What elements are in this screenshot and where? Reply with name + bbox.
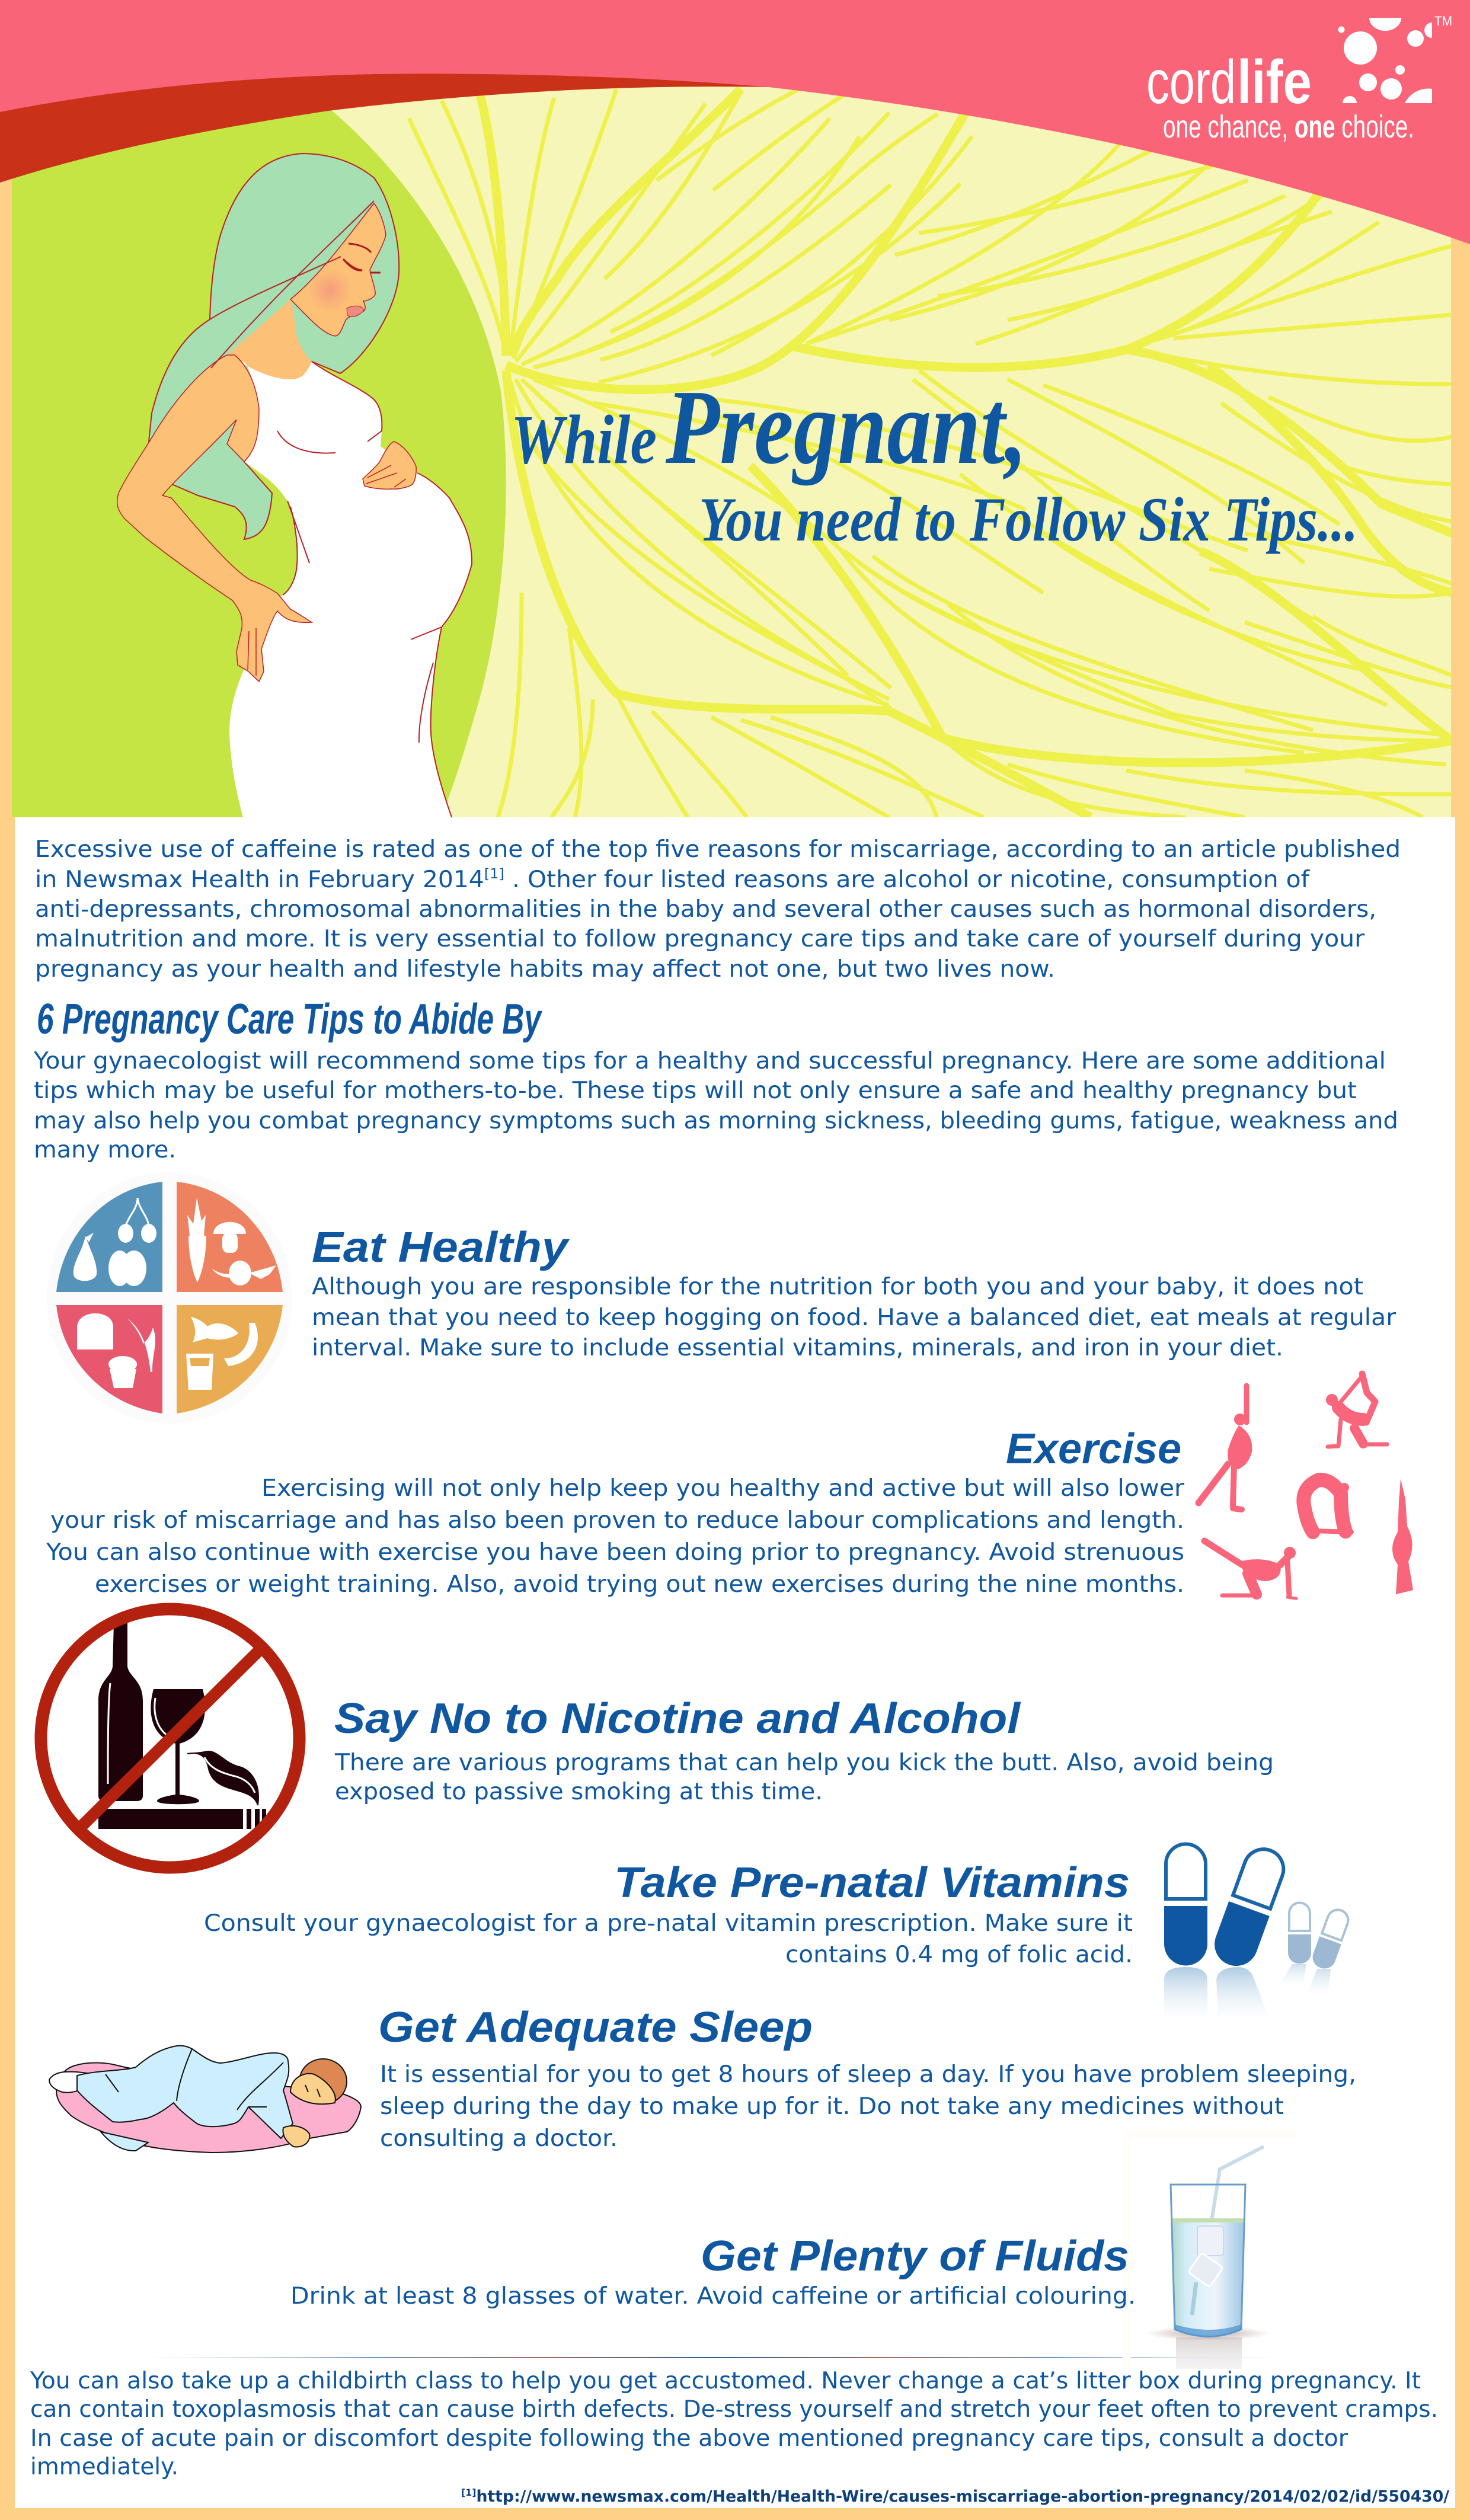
capsule one (1164, 1844, 1207, 1965)
plate halo (47, 1172, 292, 1424)
body text (380, 2061, 1356, 2152)
lower leg (101, 2132, 148, 2151)
pink band (0, 0, 1470, 244)
neck (227, 299, 312, 379)
shadow (1146, 2326, 1270, 2340)
arm (117, 355, 312, 682)
lips (347, 306, 364, 316)
section intro paragraph: may also help you combat pregnancy symptoms such as morning sickness, bleeding gums, fatigue, weakness and (34, 1108, 1398, 1134)
intro paragraph: Excessive use of caffeine is rated as one of the top five reasons for miscarriage, according to an article published (35, 836, 1401, 863)
body text (334, 1750, 1274, 1805)
bottle highlight (108, 1683, 110, 1784)
closing paragraph: In case of acute pain or discomfort despite following the above mentioned pregnancy care tips, consult a doctor (30, 2425, 1348, 2452)
smoke (187, 1751, 258, 1805)
heading: Exercise (1006, 1425, 1181, 1473)
body text: consulting a doctor. (380, 2125, 618, 2152)
body text: contains 0.4 mg of folic acid. (785, 1942, 1133, 1968)
section heading: 6 Pregnancy Care Tips to Abide By (37, 996, 543, 1043)
intro paragraph: in Newsmax Health in February 2014 (35, 866, 464, 893)
closing paragraph: You can also take up a childbirth class to help you get accustomed. Never change a cat’s litter box during pregnancy. It (30, 2368, 1421, 2394)
section intro paragraph (33, 1048, 1398, 1163)
icon: sleeping woman (49, 2046, 361, 2153)
ice cube top (1197, 2226, 1223, 2256)
yellow leaf vein pattern, thin lines (409, 89, 1452, 817)
panel: pale yellow background (332, 87, 1451, 817)
body text: Consult your gynaecologist for a pre-natal vitamin prescription. Make sure it (204, 1910, 1133, 1937)
icon: no alcohol or smoking sign (41, 1609, 299, 1867)
section intro paragraph: many more. (34, 1137, 176, 1163)
icon: vitamin capsules (1164, 1843, 1352, 2016)
closing paragraph (30, 2368, 1438, 2480)
glass base (1175, 2324, 1241, 2337)
body text: There are various programs that can help you kick the butt. Also, avoid being (334, 1750, 1274, 1776)
bottle (98, 1623, 143, 1801)
pillow (56, 2062, 361, 2153)
intro paragraph: malnutrition and more. It is very essential to follow pregnancy care tips and take care of yourself during your (35, 926, 1365, 952)
pose: kneeling backbend (1326, 1374, 1387, 1447)
green circle backdrop (12, 101, 506, 817)
tip: Take Pre-natal Vitamins (204, 1859, 1133, 1968)
body text: your risk of miscarriage and has also been proven to reduce labour complications and length. (50, 1507, 1184, 1534)
hand (283, 2126, 309, 2147)
intro paragraph: [1] (484, 866, 504, 882)
heading: Say No to Nicotine and Alcohol (334, 1695, 1021, 1742)
pajama folds (106, 2049, 283, 2110)
tip: Eat Healthy (312, 1224, 1396, 1361)
hand on belly (363, 442, 416, 489)
logo mark dots (1338, 18, 1432, 103)
trademark: TM (1434, 14, 1452, 28)
reflection (1176, 2337, 1242, 2369)
intro paragraph (35, 836, 1401, 983)
reflections (1164, 1967, 1207, 2016)
heading: Eat Healthy (312, 1224, 570, 1271)
hair (149, 153, 399, 539)
top curved band (0, 0, 1470, 244)
tip: Say No to Nicotine and Alcohol (334, 1695, 1274, 1805)
sock (49, 2072, 107, 2093)
capsule two (1209, 1843, 1291, 1972)
content panel (15, 817, 1455, 2508)
intro paragraph: anti-depressants, chromosomal abnormalities in the baby and several other causes such as hormonal disorders, (35, 896, 1376, 923)
outline strokes (210, 201, 472, 817)
water (1171, 2218, 1245, 2336)
body text: mean that you need to keep hogging on food. Have a balanced diet, eat meals at regular (312, 1304, 1396, 1331)
body text (46, 1475, 1185, 1598)
title (511, 368, 1358, 554)
food silhouettes (74, 1198, 276, 1390)
closing paragraph: can contain toxoplasmosis that can cause birth defects. De-stress yourself and stretch your feet often to prevent cramps. (30, 2396, 1438, 2423)
tip: Exercise (46, 1425, 1185, 1598)
finger lines (248, 628, 256, 676)
body text (204, 1910, 1133, 1968)
body text: Although you are responsible for the nutrition for both you and your baby, it does not (312, 1274, 1363, 1300)
glass outline (1171, 2185, 1245, 2336)
footnote source link: http://www.newsmax.com/Health/Health-Wire/causes-miscarriage-abortion-pregnancy/2014/02/02/id/550430/ (476, 2487, 1449, 2506)
body text (312, 1274, 1396, 1361)
icon: yoga silhouettes (1199, 1374, 1413, 1598)
pink quadrant: grains (56, 1305, 162, 1413)
hero banner (12, 59, 1452, 817)
dark red swoosh (0, 0, 771, 183)
icon: food plate (47, 1172, 292, 1424)
ice cube lower (1188, 2253, 1223, 2287)
hair (299, 2059, 347, 2104)
face (290, 2074, 335, 2104)
body text: exposed to passive smoking at this time. (335, 1779, 823, 1805)
illustration: pregnant woman (117, 153, 472, 817)
pose: headstand (1392, 1479, 1413, 1594)
belly hand finger lines (366, 465, 406, 487)
closed eyes (305, 2085, 320, 2097)
orange quadrant: vegetables (177, 1182, 283, 1292)
cigarette (98, 1809, 266, 1829)
blue quadrant: fruit (56, 1182, 162, 1292)
yellow leaf vein pattern, thick branches (480, 89, 1452, 817)
title line: You need to follow: You need to Follow Six Tips... (699, 485, 1358, 554)
title: Pregnant, (665, 368, 1027, 486)
prohibition ring and slash (82, 1649, 260, 1826)
body text: exercises or weight training. Also, avoid trying out new exercises during the nine months. (95, 1571, 1184, 1598)
small capsule three (1288, 1902, 1311, 1963)
water edge tint (1171, 2218, 1245, 2222)
section intro paragraph: Your gynaecologist will recommend some tips for a healthy and successful pregnancy. Here are some additional (33, 1048, 1386, 1074)
heading: Take Pre-natal Vitamins (614, 1859, 1130, 1907)
section intro paragraph: tips which may be useful for mothers-to-be. These tips will not only ensure a safe and healthy pregnancy but (34, 1077, 1357, 1104)
straw (1211, 2147, 1264, 2224)
dress (227, 355, 472, 817)
pose: cat leg lift (1204, 1541, 1296, 1598)
small capsule four (1309, 1907, 1352, 1972)
eye and brow (343, 244, 381, 273)
body text: Exercising will not only help keep you healthy and active but will also lower (261, 1475, 1185, 1502)
wine glass (151, 1689, 205, 1804)
body text: sleep during the day to make up for it. Do not take any medicines without (380, 2093, 1284, 2120)
body text: Drink at least 8 glasses of water. Avoid caffeine or artificial colouring. (290, 2283, 1136, 2310)
tagline: one chance, one choice. (1163, 109, 1414, 145)
body text: It is essential for you to get 8 hours of sleep a day. If you have problem sleeping, (380, 2061, 1356, 2088)
body text: You can also continue with exercise you have been doing prior to pregnancy. Avoid strenuous (46, 1539, 1184, 1566)
pose: standing stretch (1199, 1386, 1252, 1510)
divider (140, 2357, 1285, 2358)
glass highlight (155, 1698, 167, 1735)
icon: glass of water (1127, 2134, 1297, 2369)
title line: While Pregnant: While (511, 401, 657, 478)
pose: bridge (1303, 1480, 1351, 1532)
heading: Get Plenty of Fluids (701, 2233, 1129, 2280)
logo: cordlife (1146, 14, 1452, 145)
faint image frame (1127, 2134, 1297, 2369)
tip: Get Plenty of Fluids (290, 2233, 1136, 2310)
body text: interval. Make sure to include essential vitamins, minerals, and iron in your diet. (312, 1335, 1283, 1361)
footnote source link: [1] (461, 2487, 476, 2498)
pajamas (77, 2046, 293, 2138)
smoke highlights (204, 1757, 255, 1793)
heading: Get Adequate Sleep (378, 2004, 813, 2051)
face (290, 203, 386, 336)
tip: Get Adequate Sleep (378, 2004, 1356, 2152)
closing paragraph: immediately. (30, 2454, 178, 2480)
intro paragraph: . Other four listed reasons are alcohol or nicotine, consumption of (504, 866, 1310, 893)
blush (309, 269, 351, 312)
lower straw (1192, 2282, 1196, 2315)
gold quadrant: protein (177, 1305, 283, 1413)
intro paragraph: pregnancy as your health and lifestyle habits may affect not one, but two lives now. (35, 956, 1055, 983)
logo: cordlife: life (1237, 48, 1312, 117)
wordmark: cord (1146, 48, 1236, 117)
